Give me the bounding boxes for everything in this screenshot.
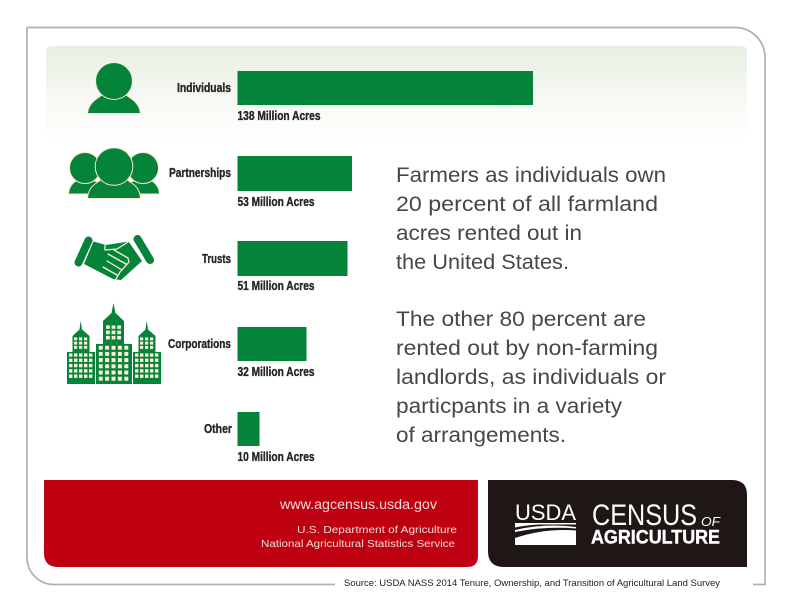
text block: non-farming landlords: of arrangements. — [396, 423, 566, 447]
bar: partnerships: 53 Million Acres — [238, 195, 315, 209]
text block: non-farming landlords: rented out by non-farming — [396, 336, 658, 360]
logo: census of agriculture wordmark: CENSUS — [592, 499, 697, 532]
panel: USDA census logo — [488, 480, 747, 567]
bar: other: 10 Million Acres — [238, 450, 315, 464]
text block: non-farming landlords — [396, 307, 666, 447]
text block: farmers as individuals: 20 percent of all farmland — [396, 192, 658, 216]
logo: census of agriculture wordmark: OF — [701, 514, 721, 529]
bar: corporations: 32 Million Acres — [238, 365, 315, 379]
text block: farmers as individuals: acres rented out in — [396, 221, 582, 245]
bar: trusts: 51 Million Acres — [238, 279, 315, 293]
source note: Source: USDA NASS 2014 Tenure, Ownership, and Transition of Agricultural Land Survey — [344, 578, 720, 588]
bar: individuals: 138 Million Acres — [238, 109, 321, 123]
bar: other: Other — [204, 422, 232, 436]
icon: corporate buildings — [67, 303, 161, 384]
text block: farmers as individuals — [396, 163, 666, 274]
bar: trusts: Trusts — [202, 252, 231, 266]
logo: census of agriculture wordmark: AGRICULTURE — [591, 528, 720, 548]
bar: partnerships — [169, 156, 352, 209]
panel: highlighted individuals row background — [46, 46, 747, 142]
text block: non-farming landlords: The other 80 percent are — [396, 307, 646, 331]
bar: trusts — [202, 241, 348, 293]
panel: red agency banner: U.S. Department of Agriculture — [297, 524, 457, 536]
logo: USDA wordmark with landscape — [515, 500, 576, 545]
logo: census of agriculture wordmark — [591, 499, 721, 548]
panel: red agency banner — [44, 480, 478, 567]
panel: red agency banner: www.agcensus.usda.gov — [279, 496, 437, 512]
icon: partnership group — [68, 148, 160, 198]
bar chart: acres by owner type — [168, 71, 533, 464]
icon: individual person — [88, 63, 140, 114]
bar: individuals: Individuals — [177, 81, 231, 95]
panel: red agency banner: National Agricultural Statistics Service — [261, 538, 455, 550]
logo: USDA wordmark with landscape: USDA — [515, 500, 576, 525]
text block: non-farming landlords: particpants in a variety — [396, 394, 622, 418]
icon: handshake — [78, 239, 150, 280]
text block: farmers as individuals: the United States. — [396, 250, 569, 274]
bar: other — [204, 412, 315, 464]
bar: partnerships: Partnerships — [169, 166, 231, 180]
bar: corporations — [168, 327, 315, 379]
bar: individuals — [177, 71, 533, 123]
text block: non-farming landlords: landlords, as individuals or — [396, 365, 666, 389]
text block: farmers as individuals: Farmers as individuals own — [396, 163, 666, 187]
bar: corporations: Corporations — [168, 337, 231, 351]
